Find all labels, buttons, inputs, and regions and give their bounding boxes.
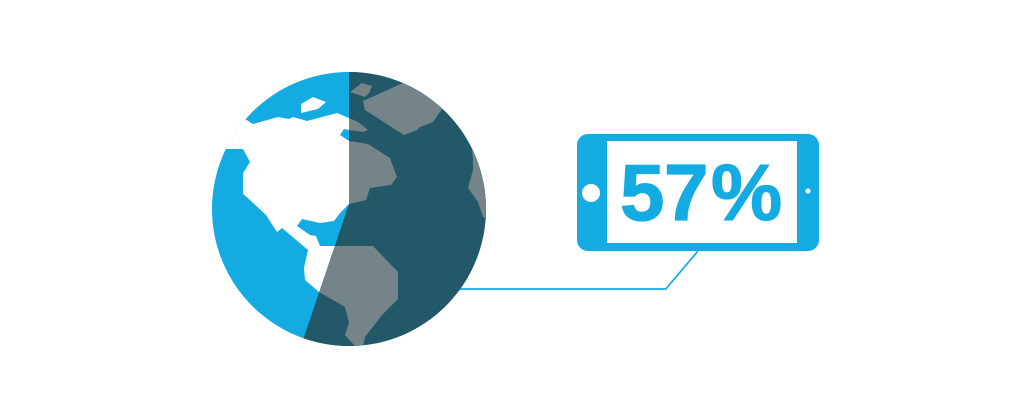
- globe: [212, 72, 486, 346]
- home button: [582, 184, 600, 202]
- white continents: [226, 97, 363, 346]
- phone screen: [607, 141, 797, 243]
- phone icon: [577, 134, 819, 251]
- camera dot: [805, 188, 811, 194]
- shaded half of globe: [304, 72, 486, 346]
- phone body: [577, 134, 819, 251]
- connector line: [440, 251, 698, 289]
- percentage value: 57%: [620, 148, 782, 237]
- globe ocean: [212, 72, 486, 346]
